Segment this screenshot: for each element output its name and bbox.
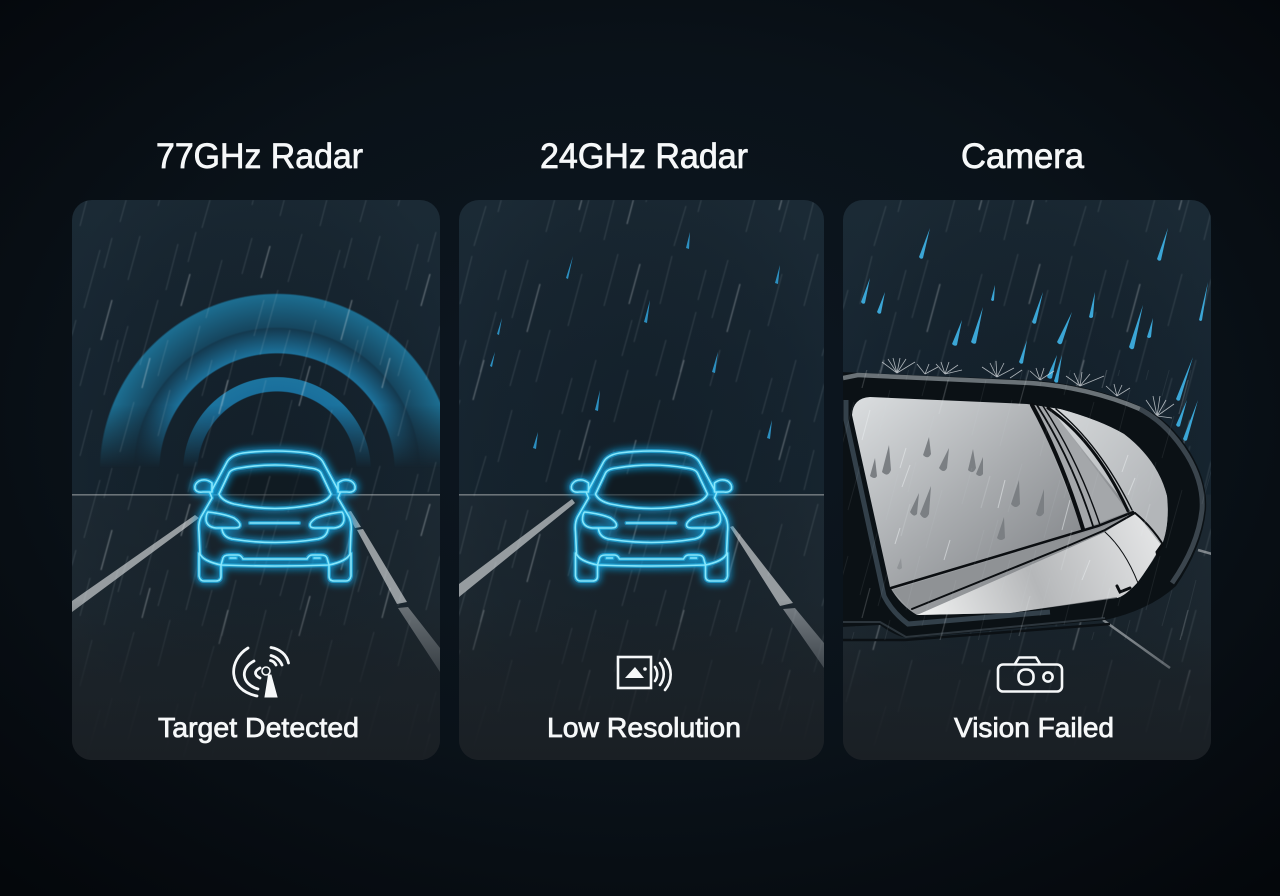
horizon line [459, 494, 824, 496]
droplet splashes on mirror top [882, 358, 1174, 418]
blue rain streaks [861, 228, 1208, 441]
rain [459, 200, 824, 698]
road marking [1103, 550, 1212, 668]
car outline [195, 451, 355, 581]
title: 24GHz Radar: 24GHz Radar [540, 137, 748, 176]
title: Camera: Camera [961, 137, 1085, 176]
window pillar lines [891, 405, 1162, 609]
bottom fade [459, 600, 824, 760]
water drops on glass [870, 437, 1044, 570]
mirror housing [840, 372, 1206, 640]
light streaks on glass [862, 410, 1135, 580]
car outline [571, 451, 732, 581]
label: Target Detected: Target Detected [158, 712, 359, 743]
panel: 77GHz radar [72, 200, 455, 760]
panel: 24GHz radar [459, 200, 824, 760]
icon: camera [998, 658, 1062, 692]
road markings [72, 511, 440, 672]
label: Low Resolution: Low Resolution [547, 712, 741, 743]
blue rain streaks [490, 232, 780, 449]
mirror glass reflection [852, 397, 1168, 615]
title: 77GHz Radar: 77GHz Radar [156, 137, 363, 176]
bottom fade [843, 640, 1211, 760]
radar arcs [100, 293, 440, 463]
rain [72, 200, 440, 661]
icon: low-res image with waves [618, 657, 671, 690]
panel: camera [840, 200, 1212, 760]
icon: radar tower [234, 648, 288, 697]
road markings [459, 499, 824, 668]
rain [843, 200, 1211, 760]
horizon line [72, 494, 440, 496]
bottom fade [72, 600, 440, 760]
label: Vision Failed: Vision Failed [954, 712, 1114, 743]
rain over mirror [843, 370, 1211, 640]
